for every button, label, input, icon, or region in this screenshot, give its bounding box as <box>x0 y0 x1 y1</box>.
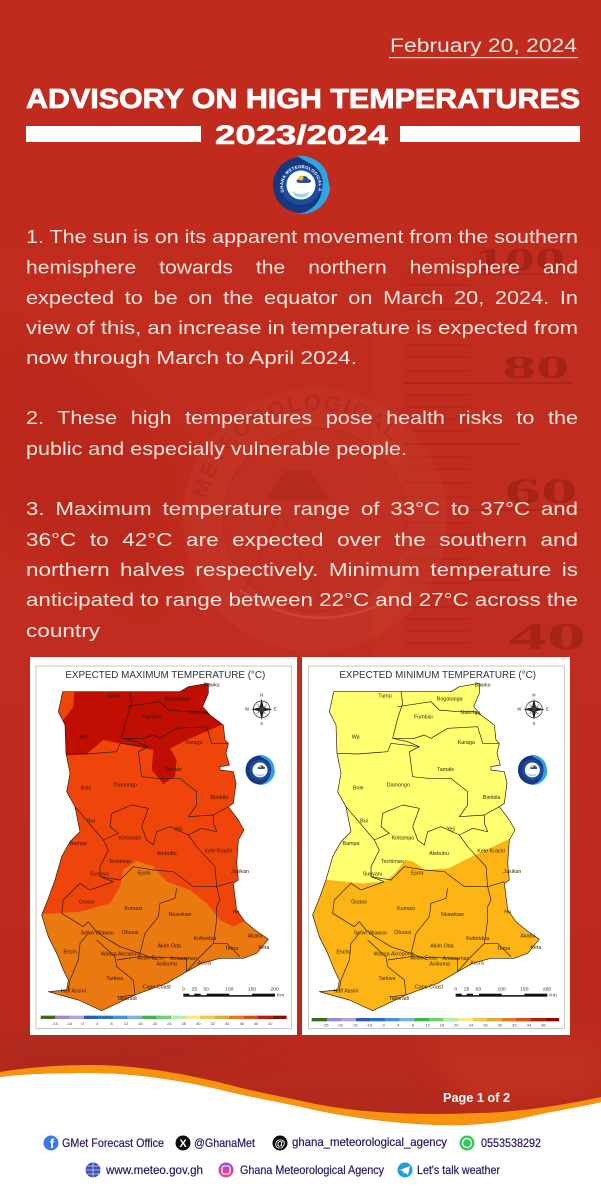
panel: expected maximum temperature map: Keta <box>259 945 270 951</box>
background agency seal: METEOROLOGICAL <box>192 394 394 498</box>
panel: expected minimum temperature map: Yeji <box>446 827 455 833</box>
background thermometer: 60 <box>504 471 578 511</box>
paragraph 3 <box>26 498 578 641</box>
panel: expected minimum temperature map: Sefwi Wiawso <box>354 930 387 936</box>
panel: expected maximum temperature map: 32 <box>210 1021 216 1026</box>
panel: expected minimum temperature map: Kumasi <box>397 906 415 912</box>
panel: expected maximum temperature map: Techiman <box>109 859 131 865</box>
panel: expected minimum temperature map: Km <box>549 993 557 999</box>
panel: expected minimum temperature map: Sunyani <box>363 872 382 878</box>
panel: expected maximum temperature map: 50 <box>203 987 209 993</box>
panel: expected minimum temperature map: Bui <box>360 819 368 825</box>
paragraph 1: expected to be on the equator on March 20, 2024. In <box>26 287 578 308</box>
panel: expected minimum temperature map: E <box>546 707 549 712</box>
panel: expected maximum temperature map: Enchi <box>63 949 77 955</box>
title: 2023/2024 <box>215 120 388 150</box>
panel: expected minimum temperature map: 200 <box>543 987 551 993</box>
panel: expected maximum temperature map: Bampa <box>70 841 87 847</box>
panel: expected minimum temperature map: Bampa <box>343 841 359 847</box>
panel: expected maximum temperature map: Atebubu <box>157 851 177 857</box>
panel: expected minimum temperature map: Obuasi <box>394 930 411 936</box>
contact: Facebook: GMet Forecast Office <box>62 1136 164 1150</box>
panel: expected minimum temperature map: Atebubu <box>429 851 449 857</box>
panel: expected minimum temperature map: 50 <box>476 987 481 993</box>
paragraph 3: 36°C to 42°C are expected over the southern and <box>26 529 578 550</box>
panel: expected maximum temperature map <box>30 657 297 1035</box>
panel: expected minimum temperature map: Damongo <box>387 783 410 789</box>
panel: expected maximum temperature map: Cape Coast <box>143 984 171 990</box>
panel: expected minimum temperature map: Cape Coast <box>415 984 444 990</box>
panel: expected maximum temperature map: Tema <box>225 946 238 952</box>
panel: expected minimum temperature map: EXPECTED MINIMUM TEMPERATURE (°C) <box>339 670 536 681</box>
panel: expected minimum temperature map: Karaga <box>458 740 475 746</box>
panel: expected minimum temperature map: -25 <box>323 1023 329 1028</box>
panel: expected minimum temperature map: Jasikan <box>503 869 521 875</box>
title: ADVISORY ON HIGH TEMPERATURES <box>26 83 580 114</box>
panel: expected maximum temperature map: Tamale <box>165 767 182 773</box>
panel: expected maximum temperature map: Accra <box>198 960 211 966</box>
panel: expected minimum temperature map: Keta <box>531 945 542 951</box>
panel: expected maximum temperature map: Kintampo <box>119 835 141 841</box>
panel: expected maximum temperature map: Koforidua <box>194 936 216 942</box>
panel: expected minimum temperature map: 4 <box>397 1023 400 1028</box>
contact: Instagram: Ghana Meteorological Agency <box>240 1163 384 1177</box>
paragraph 1: now through March to April 2024. <box>26 347 357 368</box>
panel: expected maximum temperature map: Amasaman <box>170 956 197 962</box>
panel: expected maximum temperature map: Wa <box>79 734 87 740</box>
panel: expected minimum temperature map: 100 <box>498 987 506 993</box>
panel: expected minimum temperature map: Ejura <box>411 870 423 876</box>
panel: expected minimum temperature map: Nalerigu <box>460 710 480 716</box>
panel: expected minimum temperature map: W <box>517 707 522 712</box>
panel: expected maximum temperature map: Goaso <box>79 900 95 906</box>
contact: Telegram <box>398 1162 500 1178</box>
panel: expected maximum temperature map: Ho <box>233 909 239 915</box>
panel: expected minimum temperature map: 16 <box>440 1023 445 1028</box>
panel: expected maximum temperature map: Tarkwa <box>106 976 123 982</box>
paragraph 2 <box>26 407 578 459</box>
paragraph 2: 2. These high temperatures pose health risks to the <box>26 407 578 428</box>
panel: expected minimum temperature map: 0 <box>383 1023 386 1028</box>
panel: expected maximum temperature map: 4 <box>96 1021 99 1026</box>
panel: expected maximum temperature map: Jasikan <box>231 869 249 875</box>
panel: expected minimum temperature map: Accra <box>470 960 484 966</box>
panel: expected maximum temperature map: -15 <box>52 1021 59 1026</box>
page number: Page 1 of 2 <box>443 1090 510 1105</box>
panel: expected maximum temperature map: 8 <box>111 1021 114 1026</box>
panel: expected minimum temperature map: -20 <box>337 1023 344 1028</box>
panel: expected maximum temperature map: Sunyani <box>90 872 109 878</box>
panel: expected maximum temperature map: 30 <box>196 1021 201 1026</box>
panel: expected minimum temperature map: 25 <box>464 987 470 993</box>
contact: Facebook: f <box>50 1136 55 1151</box>
panel: expected maximum temperature map: EXPECTED MAXIMUM TEMPERATURE (°C) <box>65 670 265 681</box>
panel: expected minimum temperature map: Techiman <box>381 859 404 865</box>
contact: WhatsApp <box>460 1136 541 1150</box>
panel: expected maximum temperature map: W <box>245 707 250 712</box>
panel: expected maximum temperature map: 24 <box>167 1021 172 1026</box>
panel: expected minimum temperature map: 32 <box>512 1023 517 1028</box>
panel: expected minimum temperature map: 30 <box>498 1023 503 1028</box>
panel: expected maximum temperature map: 150 <box>248 987 256 993</box>
panel: expected maximum temperature map: Damongo <box>114 783 137 789</box>
panel: expected minimum temperature map: -10 <box>366 1023 373 1028</box>
contact: WhatsApp: 0553538292 <box>481 1136 541 1150</box>
panel: expected maximum temperature map: Wassa Akropong <box>101 951 141 957</box>
panel: expected maximum temperature map: S <box>260 721 263 726</box>
contact: website: www.meteo.gov.gh <box>105 1163 203 1177</box>
panel: expected maximum temperature map: 42 <box>268 1021 273 1026</box>
paragraph 3: northern halves respectively. Minimum temperature is <box>26 559 578 580</box>
panel: expected minimum temperature map: Fumbisi <box>414 714 433 720</box>
panel: expected minimum temperature map: Assin Fosu <box>410 955 437 961</box>
paragraph 3: 3. Maximum temperature range of 33°C to 37°C and <box>26 498 578 519</box>
panel: expected minimum temperature map: N <box>532 693 536 698</box>
panel: expected maximum temperature map: Half Assini <box>61 988 86 994</box>
panel: expected minimum temperature map: Kete Krachi <box>477 848 505 854</box>
panel: expected minimum temperature map: Koforidua <box>466 936 489 942</box>
panel: expected minimum temperature map: Takoradi <box>389 996 409 1002</box>
background thermometer <box>373 242 586 660</box>
contact: X: @GhanaMet <box>194 1136 256 1150</box>
panel: expected minimum temperature map: Ho <box>504 909 511 915</box>
panel: expected maximum temperature map: Nalerigu <box>188 710 208 716</box>
panel: expected maximum temperature map: 36 <box>239 1021 245 1026</box>
panel: expected maximum temperature map: Karaga <box>185 740 203 746</box>
panel: expected maximum temperature map: Takoradi <box>117 996 137 1002</box>
panel: expected maximum temperature map: Bimbila <box>211 795 228 801</box>
panel: expected minimum temperature map: 28 <box>483 1023 488 1028</box>
panel: expected maximum temperature map: Bui <box>87 819 95 825</box>
panel: expected maximum temperature map: -10 <box>66 1021 73 1026</box>
panel: expected maximum temperature map: Km <box>277 993 284 999</box>
panel: expected maximum temperature map: Assin Fosu <box>137 955 164 961</box>
title <box>26 83 580 150</box>
background thermometer: 80 <box>502 350 570 386</box>
panel: expected minimum temperature map <box>302 657 570 1035</box>
panel: expected maximum temperature map: 28 <box>181 1021 187 1026</box>
panel: expected maximum temperature map: Kete Krachi <box>205 848 232 854</box>
panel: expected minimum temperature map: Wa <box>352 734 360 740</box>
panel: expected maximum temperature map: 12 <box>124 1021 129 1026</box>
background thermometer: 40 <box>508 616 586 658</box>
panel: expected maximum temperature map: E <box>274 707 277 712</box>
white footer with orange wave <box>0 1065 601 1200</box>
panel: expected maximum temperature map: N <box>260 693 263 698</box>
panel: expected maximum temperature map: Tumu <box>107 693 120 699</box>
panel: expected maximum temperature map: Ejura <box>138 870 150 876</box>
paragraph 1: view of this, an increase in temperature is expected from <box>26 317 578 338</box>
panel: expected minimum temperature map: Akim Oda <box>430 944 454 950</box>
panel: expected minimum temperature map: Half Assini <box>334 988 358 994</box>
panel: expected minimum temperature map: 8 <box>412 1023 415 1028</box>
panel: expected maximum temperature map: Obuasi <box>122 930 138 936</box>
panel: expected minimum temperature map: Amasaman <box>443 956 470 962</box>
panel: expected minimum temperature map: Tamale <box>437 767 454 773</box>
panel: expected minimum temperature map: -15 <box>352 1023 358 1028</box>
panel: expected minimum temperature map: 24 <box>469 1023 474 1028</box>
panel: expected maximum temperature map: Nkawkaw <box>169 912 192 918</box>
panel: expected minimum temperature map: 0 <box>454 987 457 993</box>
background thermometer: 100 <box>475 242 565 278</box>
date: February 20, 2024 <box>390 35 577 57</box>
panel: expected minimum temperature map: S <box>533 721 536 726</box>
panel: expected minimum temperature map: Tumu <box>378 693 392 699</box>
panel: expected maximum temperature map: 34 <box>225 1021 230 1026</box>
panel: expected minimum temperature map: Asikuma <box>429 961 450 967</box>
panel: expected minimum temperature map: Bimbila <box>483 795 500 801</box>
panel: expected maximum temperature map: 25 <box>192 987 197 993</box>
panel: expected minimum temperature map: Akatsi <box>520 934 535 940</box>
panel: expected maximum temperature map: Akim Oda <box>158 944 181 950</box>
contact: X <box>176 1136 256 1150</box>
icon: agency logo: GHANA METEOROLOGICAL AGENCY <box>280 165 322 192</box>
panel: expected minimum temperature map: Goaso <box>351 900 367 906</box>
panel: expected maximum temperature map: 0 <box>82 1021 85 1026</box>
panel: expected maximum temperature map: Kumasi <box>124 906 142 912</box>
panel: expected minimum temperature map: Wassa Akropong <box>374 951 414 957</box>
paragraph 1: 1. The sun is on its apparent movement from the southern <box>26 226 578 247</box>
panel: expected minimum temperature map: Tarkwa <box>379 976 395 982</box>
panel: expected minimum temperature map: Tema <box>497 946 510 952</box>
contact: Threads: ghana_meteorological_agency <box>292 1135 447 1149</box>
panel: expected minimum temperature map: Nkawkaw <box>441 912 464 918</box>
panel: expected maximum temperature map: 40 <box>254 1021 259 1026</box>
panel: expected maximum temperature map: Akatsi <box>248 934 262 940</box>
panel: expected maximum temperature map: 20 <box>153 1021 158 1026</box>
panel: expected maximum temperature map: Bawku <box>204 683 220 689</box>
contact: Threads: @ <box>275 1138 286 1150</box>
icon: agency logo <box>273 156 330 214</box>
paragraph 3: country <box>26 620 101 641</box>
panel: expected minimum temperature map: Bogatanga <box>437 697 463 703</box>
panel: expected maximum temperature map: 16 <box>138 1021 143 1026</box>
paragraph 2: public and especially vulnerable people. <box>26 438 407 459</box>
panel: expected maximum temperature map: Bogatanga <box>164 697 190 703</box>
panel: expected minimum temperature map: Bole <box>353 786 364 792</box>
paragraph 1 <box>26 226 578 368</box>
panel: expected minimum temperature map: 36 <box>541 1023 546 1028</box>
panel: expected maximum temperature map: 100 <box>225 987 234 993</box>
panel: expected minimum temperature map: Bawku <box>475 683 491 689</box>
panel: expected minimum temperature map: 20 <box>454 1023 459 1028</box>
panel: expected maximum temperature map: Yeji <box>174 827 183 833</box>
contact: X: X <box>179 1138 187 1150</box>
panel: expected minimum temperature map: Enchi <box>336 949 350 955</box>
panel: expected maximum temperature map: Fumbisi <box>142 714 161 720</box>
panel: expected maximum temperature map: 0 <box>182 987 185 993</box>
panel: expected maximum temperature map: Asikuma <box>156 961 177 967</box>
panel: expected maximum temperature map: Sefwi Wiawso <box>81 930 114 936</box>
panel: expected minimum temperature map: Kintampo <box>392 835 414 841</box>
panel: expected maximum temperature map: 200 <box>271 987 279 993</box>
panel: expected minimum temperature map: 150 <box>520 987 529 993</box>
contact: Telegram: Let's talk weather <box>417 1163 500 1177</box>
panel: expected minimum temperature map: 12 <box>425 1023 431 1028</box>
panel: expected maximum temperature map: Bole <box>81 786 91 792</box>
panel: expected minimum temperature map: 34 <box>527 1023 532 1028</box>
paragraph 3: anticipated to range between 22°C and 27°C across the <box>26 589 578 610</box>
paragraph 1: hemisphere towards the northern hemisphere and <box>26 256 578 278</box>
background agency seal <box>192 394 407 619</box>
